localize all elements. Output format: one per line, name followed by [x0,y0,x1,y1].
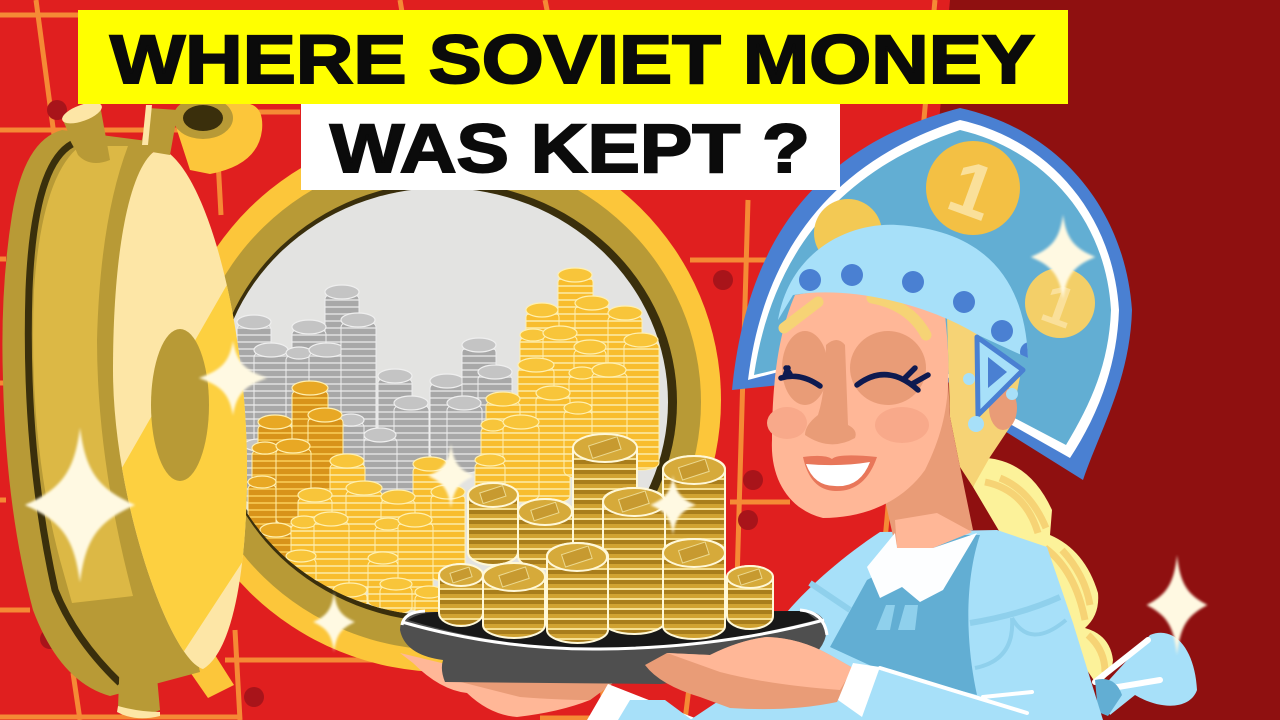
body dress [787,530,1103,720]
cheeks [875,407,929,443]
door handle recess [151,329,209,481]
neck [895,513,972,548]
collar [867,533,977,602]
ear [989,386,1017,430]
smile [803,455,877,491]
title banner: yellow [78,10,1068,104]
hat coins: 1 [1034,270,1085,340]
door inner gold panel [33,146,133,603]
eye shadow and nose [782,331,926,444]
title [78,10,1068,190]
door body [2,130,200,696]
hair [947,317,1020,487]
gold coin stacks back right [475,268,659,520]
sparkles [25,214,1207,655]
hat coins [814,141,1095,340]
door lower right peg [190,655,234,698]
neck shadow [885,315,973,545]
cap band with dots [778,225,1040,362]
vault door [2,97,262,718]
title banner: yellow: WHERE SOVIET MONEY [110,21,1035,98]
right hand and sleeve [645,637,880,720]
tray with coins [400,434,827,717]
eyebrows [784,298,926,335]
hat coins: 1 [938,143,1007,238]
coin stacks inside the vault [237,268,659,622]
kokoshnik hat [732,108,1132,480]
door face [113,152,247,669]
title banner: white: WAS KEPT ? [330,110,810,187]
braid [973,458,1113,685]
earring [963,337,1023,432]
silver coin stacks [237,285,512,505]
woman [732,108,1197,720]
tray body [400,611,826,684]
door pegs [60,98,178,718]
door hinge [173,97,262,174]
vault opening ring [169,128,721,672]
eyes [781,368,928,390]
tray interior [408,611,816,649]
left hand [400,653,613,717]
left sleeve cuff [587,684,700,720]
bow [1095,633,1197,716]
tray coin stacks [439,434,773,643]
gold coin stacks front left [248,381,465,622]
face [772,290,948,518]
